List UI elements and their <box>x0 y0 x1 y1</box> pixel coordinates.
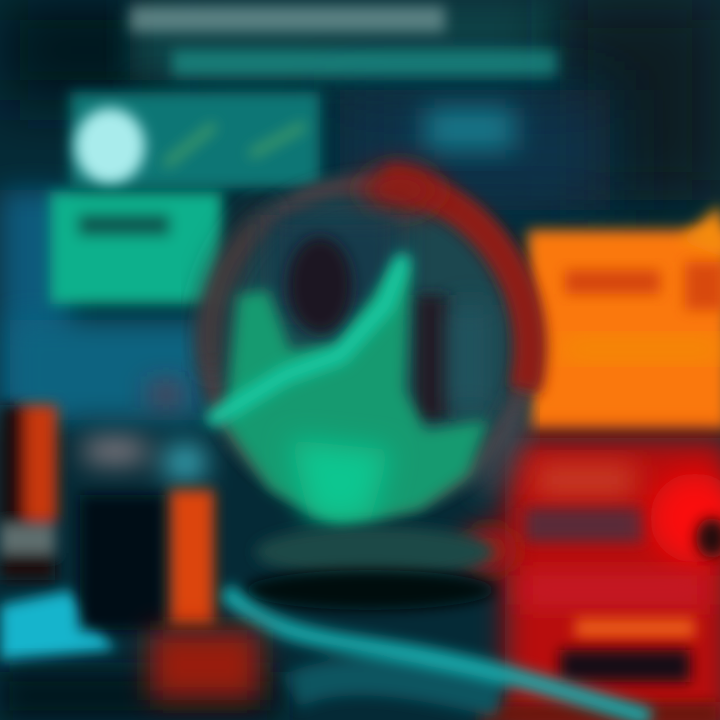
panel: orange card <box>528 205 720 430</box>
small chart marks in upper card <box>165 125 305 165</box>
pale label marks <box>85 385 205 480</box>
left stacked coins <box>0 405 57 580</box>
lower teal wave <box>225 590 650 718</box>
panel: green card <box>50 192 222 304</box>
icon: pale circle <box>75 108 145 184</box>
lower left dark floor <box>0 672 280 720</box>
globe base <box>245 526 495 610</box>
panel: upper teal card <box>70 92 515 188</box>
chart: glass globe <box>208 165 530 528</box>
title bars, illegible in the reference <box>130 6 557 76</box>
green area chart <box>225 265 488 528</box>
trend line <box>215 262 402 418</box>
lower left teal floor <box>0 590 115 662</box>
panel: red lower right <box>462 438 720 720</box>
central dark cylinder with orange bar <box>80 490 260 700</box>
